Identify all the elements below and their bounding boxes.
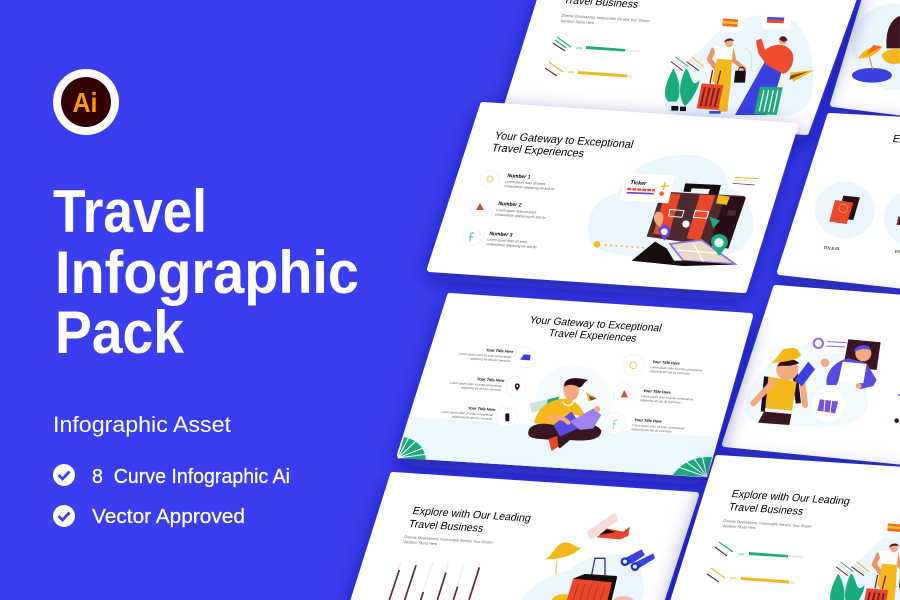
panel: gateway slide with reading boy: [398, 296, 750, 477]
left list items: adipiscing elit sed do commodo: [469, 356, 511, 363]
heading: Travel Experiences: [547, 327, 638, 345]
list item 1: Lorem ipsum dolor sit amet,: [505, 180, 546, 186]
heading: Explore with Our Leading: [411, 505, 532, 525]
list item 1: consectetuer adipiscing elit sed do: [504, 184, 555, 191]
right list items: [631, 359, 703, 434]
title: Infographic: [55, 239, 359, 306]
label: ticker: Ticker: [629, 180, 648, 187]
icon: palm leaf right: [673, 455, 712, 477]
panel: top slide explore with two travellers: [505, 0, 857, 132]
panel: lower right slide with traveller and woman: [725, 288, 900, 462]
heading: [407, 505, 532, 535]
heading: [727, 488, 851, 518]
title: Pack: [55, 299, 185, 366]
title: [53, 178, 359, 366]
right list items: Your Title Here: [643, 388, 672, 395]
illustration: two travellers with luggage: [830, 517, 900, 600]
left list items: Lorem ipsum dolor sit amet consectetuer: [441, 410, 494, 417]
heading: Travel Experiences: [490, 142, 586, 160]
feature: vector approved: Vector Approved: [92, 506, 245, 528]
left list items: adipiscing elit sed do commodo: [451, 414, 493, 421]
subheading: Diverse Destinations, Impeccable Service Your Dream: [404, 535, 493, 545]
right list items: Your Title Here: [634, 417, 663, 424]
left list items: Lorem ipsum dolor sit amet consectetuer: [450, 381, 503, 388]
subtitle: Infographic Asset: [53, 412, 231, 437]
list item 2: [471, 198, 546, 220]
light floor band: [398, 417, 717, 477]
list item 3: Lorem ipsum dolor sit amet,: [487, 238, 528, 244]
progress bar: green: [715, 542, 803, 558]
panel: top right slide with beach island: [833, 0, 900, 113]
illustration: reading boy and icons: [496, 347, 644, 451]
subheading: Vacation Starts Here: [560, 19, 595, 25]
heading: Your Gateway to Exceptional: [493, 130, 635, 151]
left list items: Lorem ipsum dolor sit amet consectetuer: [459, 352, 512, 359]
list item 3: consectetuer adipiscing elit sed do: [486, 242, 537, 249]
list item 3: [463, 228, 537, 249]
illustration: two travellers with luggage: [665, 12, 814, 117]
progress bar: green: 60%: [576, 46, 583, 50]
icon: Adobe Illustrator badge: Ai: [72, 87, 98, 118]
illustration: suitcase, hat, binoculars, ticket: [522, 512, 655, 600]
right list items: Your Title Here: [652, 359, 681, 366]
illustration: circle with passports: [815, 182, 900, 247]
label: TITLE 01: [823, 245, 841, 251]
left list items: Your Title Here: [467, 405, 497, 412]
left list items: Your Title Here: [485, 347, 515, 354]
subheading: Diverse Destinations, Impeccable Service Your Dream: [561, 14, 650, 23]
bar chart: [388, 562, 480, 600]
progress bar: yellow: [707, 568, 795, 584]
right list items: Lorem ipsum dolor sit amet consectetuer: [641, 394, 694, 401]
heading: Travel Business: [407, 518, 485, 535]
left list items: [441, 347, 515, 421]
progress bar: green: [553, 37, 640, 52]
heading: [528, 314, 663, 345]
subheading: Diverse Destinations, Impeccable Service Your Dream: [723, 519, 812, 529]
title: Travel: [53, 178, 207, 245]
list item 2: consectetuer adipiscing elit sed do: [495, 213, 546, 220]
heading: [490, 130, 635, 160]
heading: Travel Business: [727, 501, 805, 518]
right list items: Lorem ipsum dolor sit amet consectetuer: [650, 365, 703, 372]
illustration: traveller with guidebook: [745, 338, 900, 427]
icon: Adobe Illustrator badge: [53, 69, 119, 135]
heading: [562, 0, 688, 11]
subheading: Vacation Starts Here: [403, 540, 438, 546]
progress bar: yellow: 80%: [568, 70, 575, 74]
list item 2: Number 2: [497, 201, 522, 208]
list item 1: [481, 170, 555, 191]
right list items: Lorem ipsum dolor sit amet consectetuer: [632, 423, 685, 430]
progress bar: yellow: 80%: [730, 576, 737, 580]
progress bar: yellow: [545, 62, 632, 78]
left list items: adipiscing elit sed do commodo: [460, 385, 502, 392]
illustration: suitcase, map and tickets: [588, 155, 765, 266]
right list items: adipiscing elit sed do commodo: [640, 398, 681, 405]
right list items: adipiscing elit sed do commodo: [631, 427, 672, 434]
panel: gateway slide with suitcase: [430, 105, 795, 290]
heading: Your Gateway to Exceptional: [528, 314, 663, 334]
heading: Explore with Our Leading: [730, 488, 851, 508]
icon: palm leaf left: [398, 437, 428, 460]
panel: bottom right slide explore: [672, 458, 900, 600]
subheading: Vacation Starts Here: [722, 524, 757, 530]
right list items: adipiscing elit sed do commodo: [649, 369, 690, 376]
feature: curve infographic: 8 Curve Infographic Ai: [92, 466, 290, 488]
progress bar: green: 60%: [738, 552, 745, 556]
list item 2: Lorem ipsum dolor sit amet,: [496, 208, 537, 215]
list item 1: Number 1: [506, 173, 531, 180]
panel: right slide with passports: [780, 116, 900, 286]
panel: bottom slide with bar chart: [352, 475, 696, 600]
panel: slide collage: [352, 0, 900, 600]
left list items: Your Title Here: [476, 376, 506, 383]
list item 3: Number 3: [488, 231, 513, 238]
